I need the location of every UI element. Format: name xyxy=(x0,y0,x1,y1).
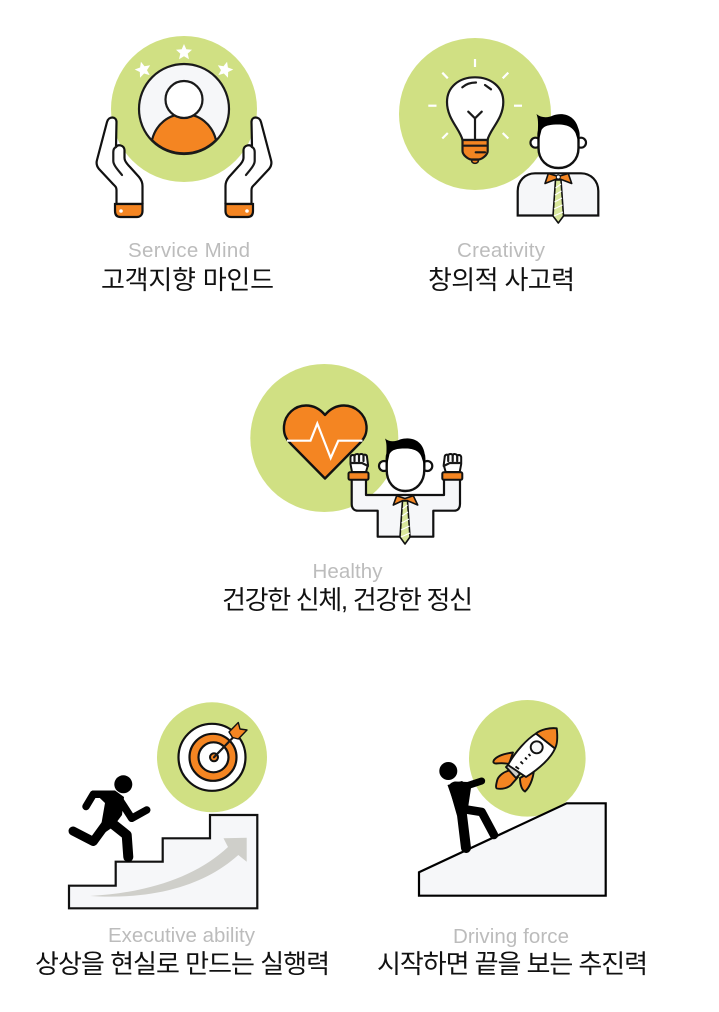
korean label: 상상을 현실로 만드는 실행력 xyxy=(35,949,330,979)
english label: Driving force xyxy=(453,925,569,948)
left cuff xyxy=(348,472,368,480)
icon: target with dart xyxy=(178,722,247,791)
icon: left fist xyxy=(350,454,368,472)
korean label: 시작하면 끝을 보는 추진력 xyxy=(377,949,648,979)
panel: driving force xyxy=(377,700,648,979)
english label: Service Mind xyxy=(128,239,250,262)
icon: businessman xyxy=(518,114,598,223)
icon: man pushing xyxy=(439,762,494,848)
english label: Healthy xyxy=(312,560,383,583)
slope xyxy=(419,803,606,896)
stairs xyxy=(69,815,257,908)
icon: businessman raising fists xyxy=(348,438,462,544)
english label: Creativity xyxy=(457,239,546,262)
icon: right hand xyxy=(226,118,271,217)
green circle xyxy=(111,36,257,182)
icon: light rays xyxy=(428,59,522,138)
green circle xyxy=(250,364,398,512)
icon: customer portrait xyxy=(139,64,229,154)
korean label: 건강한 신체, 건강한 정신 xyxy=(222,585,473,615)
green circle xyxy=(399,38,551,190)
right cuff xyxy=(442,472,462,480)
panel: executive ability xyxy=(35,702,330,979)
korean label: 창의적 사고력 xyxy=(428,265,575,295)
icon: heart with pulse xyxy=(284,406,367,478)
icon: running man xyxy=(73,775,147,857)
panel: service mind xyxy=(97,36,274,295)
green circle xyxy=(157,702,267,812)
panel: healthy xyxy=(222,364,473,615)
green circle xyxy=(469,700,586,817)
icon: light bulb xyxy=(447,77,503,163)
icon: rocket xyxy=(493,728,557,792)
korean label: 고객지향 마인드 xyxy=(101,265,274,295)
english label: Executive ability xyxy=(108,924,256,947)
icon: stars xyxy=(133,44,235,79)
panel: creativity xyxy=(399,38,598,295)
arrow rising along the stairs xyxy=(90,838,247,897)
icon: right fist xyxy=(444,454,461,472)
icon: left hand xyxy=(97,118,142,217)
